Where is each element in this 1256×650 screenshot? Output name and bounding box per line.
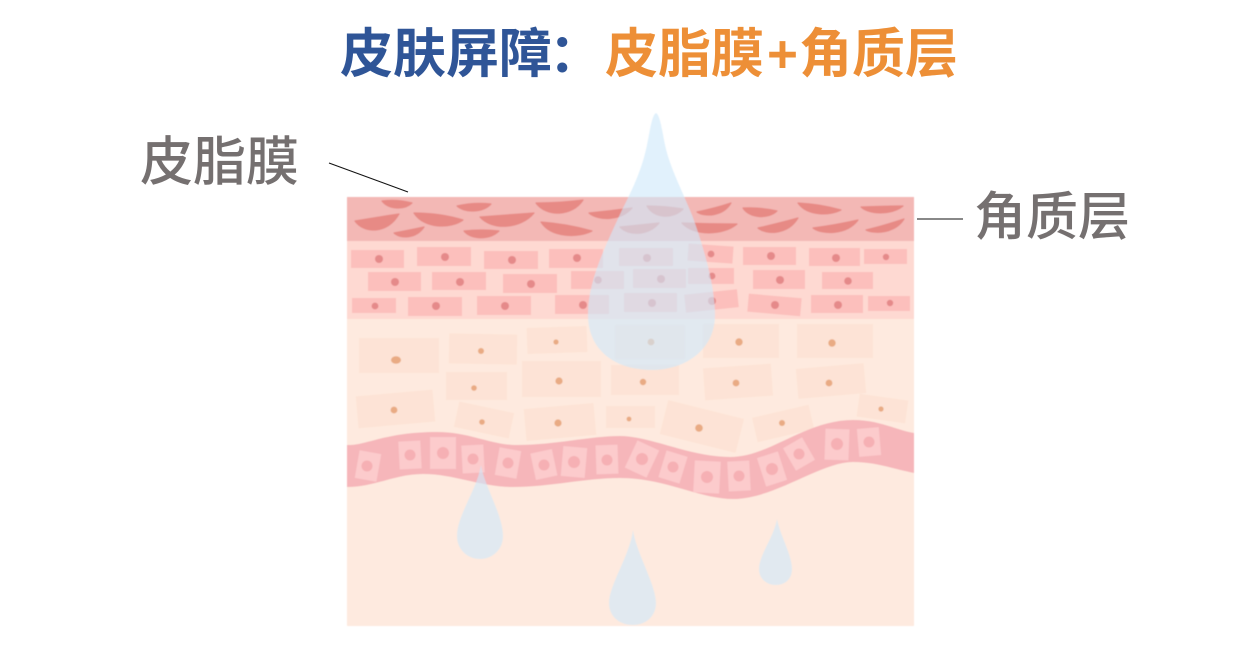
title: 角质层 [799,25,958,84]
stratum corneum band [347,197,914,241]
leader line: stratum corneum [917,218,963,220]
small water drop left [457,465,503,559]
label: stratum corneum: 角质层 [974,189,1130,247]
upper epidermis cells [351,243,910,316]
large water drop [588,113,715,370]
upper epidermis background [347,241,914,319]
basal layer nuclei [362,436,874,483]
skin cross-section diagram [347,113,914,626]
label: sebum film: 皮脂膜 [140,133,299,192]
basal layer cells [355,427,881,494]
title: 皮脂膜 [605,25,764,84]
small water drop right [759,519,792,585]
title: 皮肤屏障 [340,25,552,84]
dermis background [347,319,914,626]
title: + [767,25,798,84]
mid epidermis cells [356,324,908,453]
upper epidermis nuclei [372,251,893,310]
small water drop centre [609,530,656,625]
basal layer wavy band [347,420,914,499]
title: ： [549,25,602,84]
leader line: sebum film [329,163,408,192]
sebum lipid flakes [355,200,904,238]
mid epidermis nuclei [391,338,884,432]
